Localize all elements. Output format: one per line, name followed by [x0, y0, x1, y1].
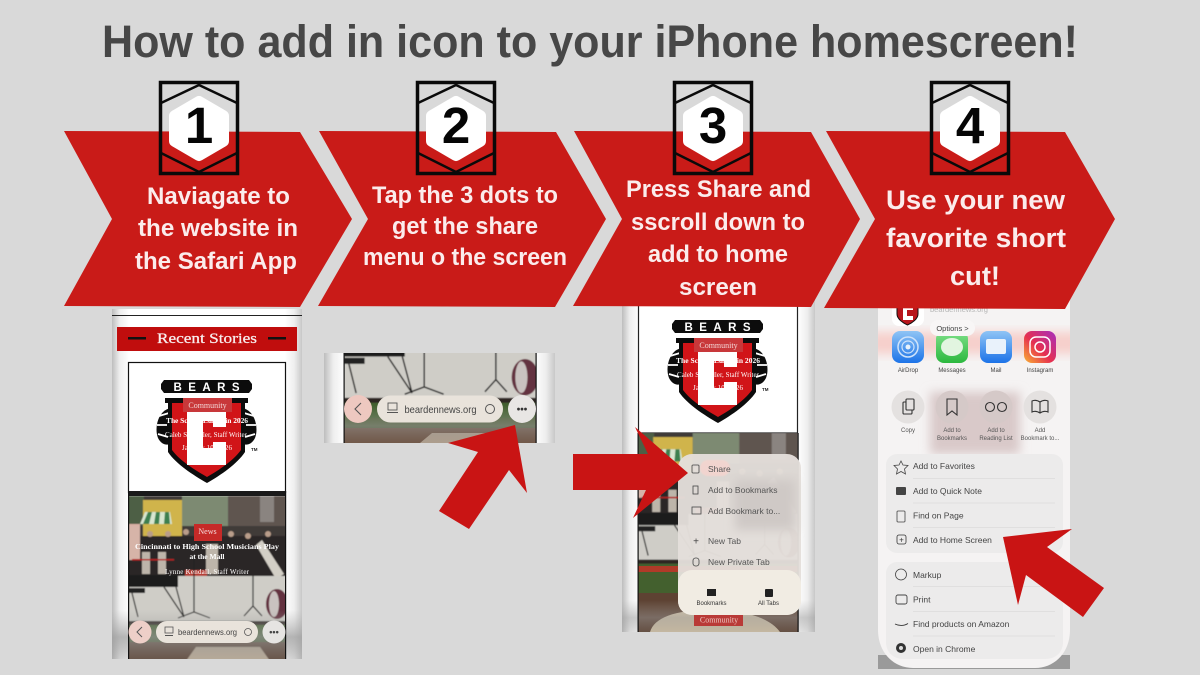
story photo text: News [198, 527, 217, 536]
options pill [930, 320, 975, 336]
safari more menu [678, 454, 801, 615]
menu group two: Markup [913, 570, 942, 580]
menu group two: Find products on Amazon [913, 619, 1010, 629]
safari more menu: Share [708, 464, 731, 474]
bears logo [668, 320, 769, 423]
quick action circles: Bookmark to... [1021, 436, 1060, 442]
Recent Stories banner [117, 327, 297, 351]
step 2 number badge [418, 82, 494, 174]
app icons row: Messages [938, 368, 966, 374]
app icons row: Instagram [1027, 368, 1053, 374]
step 2 text: get the share [392, 213, 538, 240]
menu group one: Find on Page [913, 510, 964, 520]
arrow: to add to home screen [1003, 529, 1104, 617]
app icons row: AirDrop [898, 368, 919, 374]
screenshot 1: website in Safari [112, 309, 302, 661]
community story text: January 10, 2026 [693, 384, 744, 392]
safari toolbar enlarged: beardennews.org [404, 404, 477, 416]
bears logo [157, 380, 258, 483]
quick action circles: Copy [901, 428, 915, 434]
step 3 number badge: 3 [699, 97, 727, 154]
quick action circles [892, 390, 1060, 442]
story photo text: Cincinnati to High School Musicians Play [135, 542, 279, 551]
quick action circles: Reading List [979, 436, 1013, 442]
community story text: The School Lunch in 2026 [676, 356, 760, 365]
site logo thumbnail: beardennews.org [930, 305, 988, 314]
step 3 text: screen [679, 274, 757, 301]
step 2 text [363, 182, 567, 271]
story card frame [128, 362, 286, 492]
menu group one: + [899, 536, 904, 544]
step 4 number badge [932, 82, 1008, 174]
safari more menu: Add Bookmark to... [708, 506, 780, 516]
step 1 number badge: 1 [185, 97, 213, 154]
community story text: January 10, 2026 [182, 444, 232, 452]
safari more menu: New Tab [708, 536, 741, 546]
step 3 number badge [674, 82, 752, 174]
step 1 text: the website in [138, 215, 298, 242]
safari more menu: New Private Tab [708, 557, 770, 567]
arrow: to three dots [439, 425, 527, 529]
community story text: Community [188, 401, 227, 410]
menu group one: Add to Home Screen [913, 535, 992, 545]
quick action circles: Bookmarks [937, 436, 967, 442]
step 2 text: Tap the 3 dots to [372, 182, 558, 209]
story photo text: Lynne Kendall, Staff Writer [165, 568, 250, 576]
step 1 text: Naviagate to [147, 183, 290, 210]
arrow: to share [573, 427, 688, 518]
app icons row [892, 331, 1056, 374]
story photo text [135, 524, 279, 576]
step 4 text: Use your new [886, 185, 1066, 215]
safari toolbar: ••• [269, 627, 279, 637]
menu group two: Open in Chrome [913, 644, 976, 654]
step 3 text: add to home [648, 241, 788, 268]
step 2 number badge: 2 [442, 97, 470, 154]
safari more menu: Bookmarks [696, 601, 727, 607]
quick action circles: Add to [987, 428, 1005, 434]
community story text: The School Lunch in 2026 [166, 416, 248, 425]
step 1 text [135, 183, 298, 275]
menu group two [886, 562, 1063, 659]
safari toolbar: beardennews.org [178, 627, 237, 637]
title: How to add in icon to your iPhone homescreen! [102, 16, 1078, 67]
community story text [676, 338, 760, 392]
step 4 chevron [824, 131, 1115, 309]
options pill: Options > [936, 324, 969, 333]
step 3 text: sscroll down to [631, 209, 805, 236]
app icons row: Mail [990, 368, 1002, 374]
safari toolbar [128, 620, 286, 644]
step 3 chevron [573, 131, 860, 307]
step 4 text [886, 185, 1066, 291]
screenshot 4: share sheet [870, 296, 1080, 669]
step 3 text [626, 176, 811, 301]
story photo [638, 433, 800, 632]
menu group two: Print [913, 594, 931, 604]
step 2 chevron [318, 131, 606, 307]
quick action circles: Add to [943, 428, 961, 434]
safari more menu: Add to Bookmarks [708, 485, 777, 495]
community story text: Caleb Schindler, Staff Writer [677, 371, 760, 379]
step 4 text: cut! [950, 261, 1000, 291]
safari toolbar enlarged: ••• [517, 404, 528, 416]
story photo [128, 496, 288, 661]
safari toolbar enlarged [344, 395, 536, 423]
safari more menu: + [693, 536, 699, 548]
quick action circles: Add [1035, 428, 1045, 434]
story photo text: at the Mall [190, 552, 224, 561]
community story text [165, 398, 248, 452]
step 1 chevron [64, 131, 352, 307]
Recent Stories banner: Recent Stories [157, 331, 257, 347]
screenshot 3: share menu: Community [700, 616, 738, 624]
safari more menu: All Tabs [758, 601, 779, 607]
community story text: Community [699, 341, 738, 350]
menu group one [886, 454, 1063, 553]
community story text: Caleb Schindler, Staff Writer [165, 431, 248, 439]
step 4 text: favorite short [886, 223, 1066, 253]
step 1 text: the Safari App [135, 248, 297, 275]
step 1 number badge [160, 82, 238, 174]
screenshot 3: share menu [622, 300, 815, 632]
step 4 number badge: 4 [956, 97, 985, 154]
screenshot 2: three dots toolbar [324, 353, 555, 443]
menu group one: Add to Quick Note [913, 486, 982, 496]
step 2 text: menu o the screen [363, 244, 567, 271]
step 3 text: Press Share and [626, 176, 811, 203]
site logo thumbnail [892, 296, 988, 326]
menu group one: Add to Favorites [913, 461, 975, 471]
